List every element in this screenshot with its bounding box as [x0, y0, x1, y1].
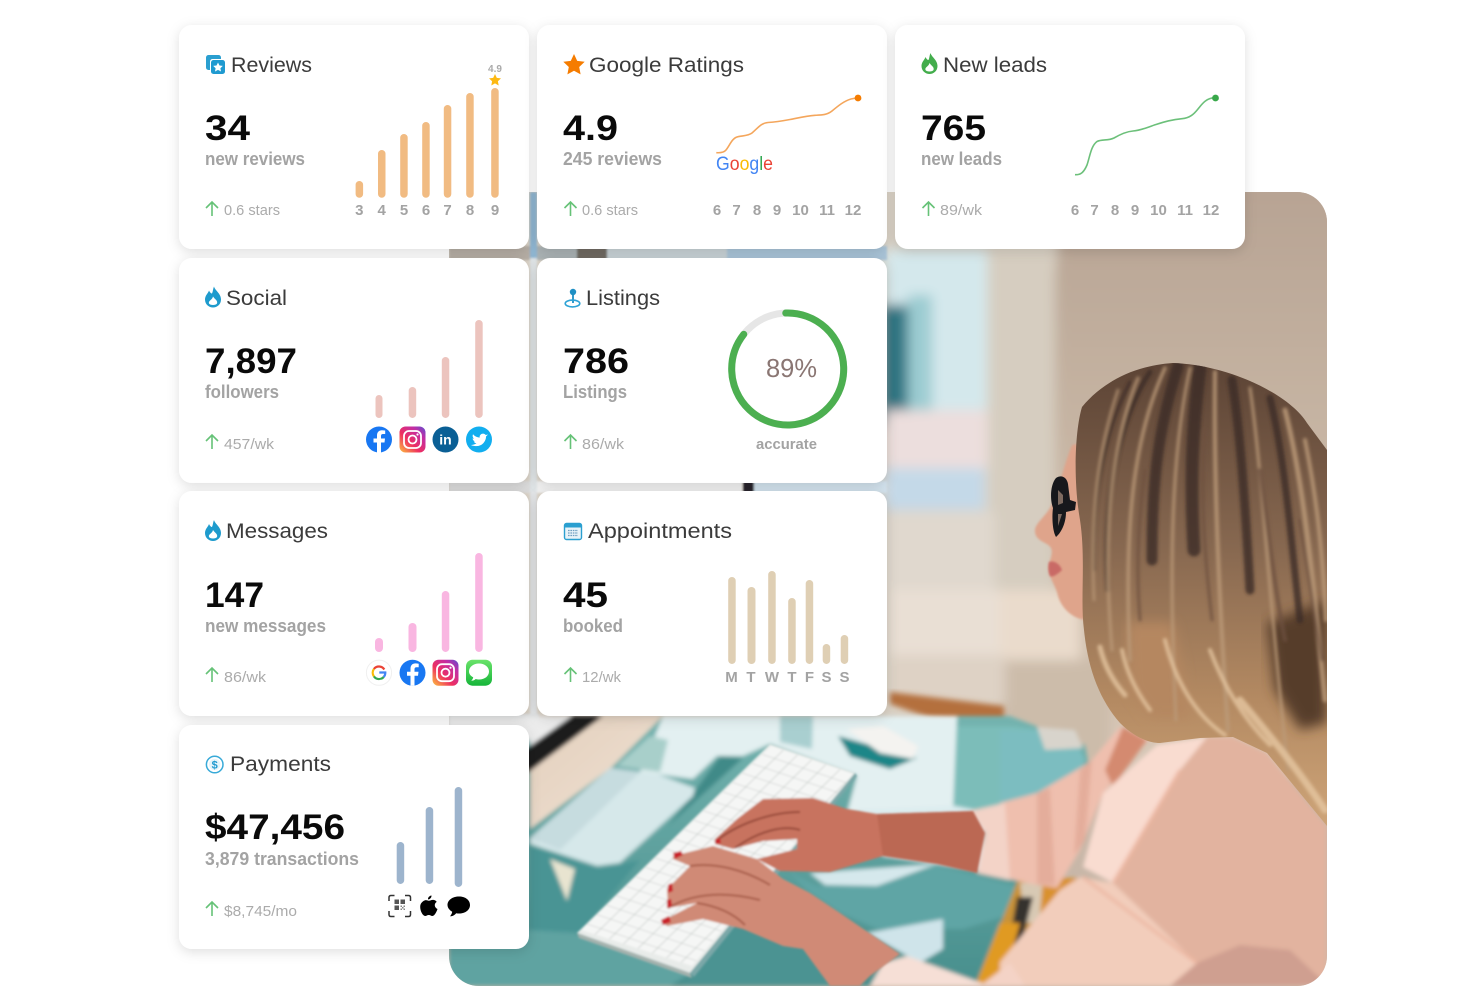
icon: instagram [432, 660, 458, 686]
value: 786: 786 [563, 342, 629, 381]
value: $47,456: $47,456 [205, 808, 345, 847]
glasses [1051, 476, 1076, 537]
bar chart: reviews by month: 4.9 [488, 64, 502, 75]
heading: New leads: New leads [943, 54, 1047, 77]
bar chart: messages by channel [375, 553, 483, 652]
face [1034, 444, 1083, 620]
trend: 89/wk [922, 202, 983, 219]
card: Listings [537, 258, 887, 483]
card: Messages [179, 491, 529, 716]
card: Reviews [179, 25, 529, 249]
heading: Reviews: Reviews [231, 54, 312, 77]
icon: QR code [389, 896, 410, 916]
icon: twitter [466, 426, 492, 452]
line chart: new leads: 10 [1150, 202, 1167, 219]
icon: calendar [564, 524, 582, 540]
trend: 86/wk [206, 668, 267, 686]
icon: dollar coin [206, 756, 223, 773]
bar chart: reviews by month: 9 [491, 202, 499, 219]
trend: 457/wk: 457/wk [224, 436, 275, 453]
caption: new reviews: new reviews [205, 149, 305, 169]
bar chart: appointments by weekday: M [725, 669, 738, 686]
bar chart: appointments by weekday: T [746, 669, 756, 686]
bar chart: reviews by month: 6 [422, 202, 430, 219]
icon: messages app [466, 660, 492, 686]
value: 34: 34 [205, 109, 251, 148]
value: 7,897: 7,897 [205, 342, 297, 381]
line chart: google rating: 12 [845, 202, 861, 219]
line chart: google rating: 7 [732, 202, 741, 219]
heading: Google Ratings: Google Ratings [589, 54, 744, 77]
sweater back [1113, 737, 1327, 986]
caption: Listings: Listings [563, 382, 627, 402]
trend: 457/wk [206, 435, 275, 453]
upper hand and forearm [714, 796, 884, 874]
photo: woman typing at a desk [440, 180, 1340, 986]
icon: orange star [563, 54, 585, 74]
bar chart: reviews by month: 8 [466, 202, 474, 219]
icon: facebook [400, 660, 426, 686]
trend: 86/wk: 86/wk [224, 669, 267, 686]
heading: Social: Social [226, 287, 287, 310]
icon: instagram [400, 426, 426, 452]
bar chart: reviews by month: 7 [443, 202, 452, 219]
icon: speech bubble [448, 896, 470, 916]
lower hand [662, 846, 900, 986]
caption: booked: booked [563, 616, 623, 636]
line chart: new leads [1071, 95, 1219, 219]
trend: 12/wk [564, 668, 621, 686]
icon: apple [420, 896, 438, 916]
card: Payments [179, 725, 529, 949]
bar chart: followers by network [376, 320, 483, 418]
bar chart: payments by method [397, 787, 462, 887]
caption: 3,879 transactions: 3,879 transactions [205, 849, 359, 869]
heading: Appointments: Appointments [588, 520, 732, 543]
line chart: new leads: 9 [1131, 202, 1139, 219]
bar chart: reviews by month [355, 64, 502, 219]
icon: facebook [366, 426, 392, 452]
icon: reviews [206, 55, 225, 74]
mouse [838, 736, 917, 769]
line chart: google rating: 8 [753, 202, 761, 219]
card: Appointments [537, 491, 887, 716]
trend: 89/wk: 89/wk [940, 202, 983, 219]
trend: 86/wk [564, 435, 625, 453]
caption: 245 reviews: 245 reviews [563, 149, 662, 169]
donut chart: 89% accurate [730, 311, 846, 453]
icon: linkedin: in [439, 432, 452, 448]
bar chart: appointments by weekday: F [805, 669, 814, 686]
line chart: google rating [713, 95, 861, 219]
value: 45: 45 [563, 576, 608, 615]
caption: new leads: new leads [921, 149, 1002, 169]
lips [1048, 561, 1062, 577]
card: Social [179, 258, 529, 483]
bar chart: appointments by weekday: S [821, 669, 832, 686]
desk corner and chair [998, 879, 1033, 932]
icon: blue flame [205, 286, 221, 308]
sweater sleeve [1000, 727, 1150, 888]
line chart: google rating: 9 [773, 202, 781, 219]
monitor stand [530, 768, 695, 866]
bar chart: reviews by month: 3 [355, 202, 363, 219]
caption: followers: followers [205, 382, 279, 402]
trend: 12/wk: 12/wk [582, 669, 621, 686]
line chart: google rating: 6 [713, 202, 721, 219]
line chart: new leads: 6 [1071, 202, 1079, 219]
icon: map pin [565, 289, 580, 307]
card: New leads [895, 25, 1245, 249]
line chart: google rating: 11 [819, 202, 835, 219]
background strips visible between the cards [449, 192, 887, 727]
heading: Payments: Payments [230, 753, 331, 776]
sweater front and collar [1105, 727, 1147, 787]
icon: google [366, 660, 392, 685]
icon: green flame [922, 53, 938, 74]
donut chart: 89% accurate: accurate [756, 436, 817, 453]
bar chart: appointments by weekday: S [839, 669, 850, 686]
caption: new messages: new messages [205, 616, 326, 636]
heading: Messages: Messages [226, 520, 328, 543]
bar chart: appointments by weekday: W [765, 669, 780, 686]
window reflections on the glass [802, 869, 1014, 929]
red nails [661, 838, 721, 925]
icon: dollar coin: $ [212, 760, 218, 772]
icon: blue flame [205, 520, 221, 541]
line chart: google rating: 10 [792, 202, 809, 219]
line chart: new leads: 8 [1111, 202, 1119, 219]
bar chart: reviews by month: 5 [400, 202, 408, 219]
desk [529, 713, 1090, 986]
line chart: new leads: 7 [1090, 202, 1099, 219]
value: 765: 765 [921, 109, 986, 148]
trend: 0.6 stars: 0.6 stars [224, 202, 280, 219]
icon: linkedin [432, 426, 458, 452]
trend: $8,745/mo: $8,745/mo [224, 903, 297, 920]
monitor [530, 716, 663, 829]
heading: Listings: Listings [586, 287, 660, 310]
bar chart: appointments by weekday: T [787, 669, 797, 686]
donut chart: 89% accurate: 89% [766, 353, 817, 383]
line chart: new leads: 12 [1203, 202, 1219, 219]
hair [1076, 363, 1327, 826]
logo: Google: Google [716, 154, 773, 175]
value: 147: 147 [205, 576, 264, 615]
card: Google Ratings [537, 25, 887, 249]
trend: 0.6 stars: 0.6 stars [582, 202, 638, 219]
line chart: new leads: 11 [1177, 202, 1193, 219]
trend: 86/wk: 86/wk [582, 436, 625, 453]
bar chart: reviews by month: 4 [378, 202, 387, 219]
bar chart: appointments by weekday [725, 571, 850, 686]
wood ledge [890, 692, 1004, 726]
value: 4.9: 4.9 [563, 109, 618, 148]
keyboard [577, 744, 855, 973]
